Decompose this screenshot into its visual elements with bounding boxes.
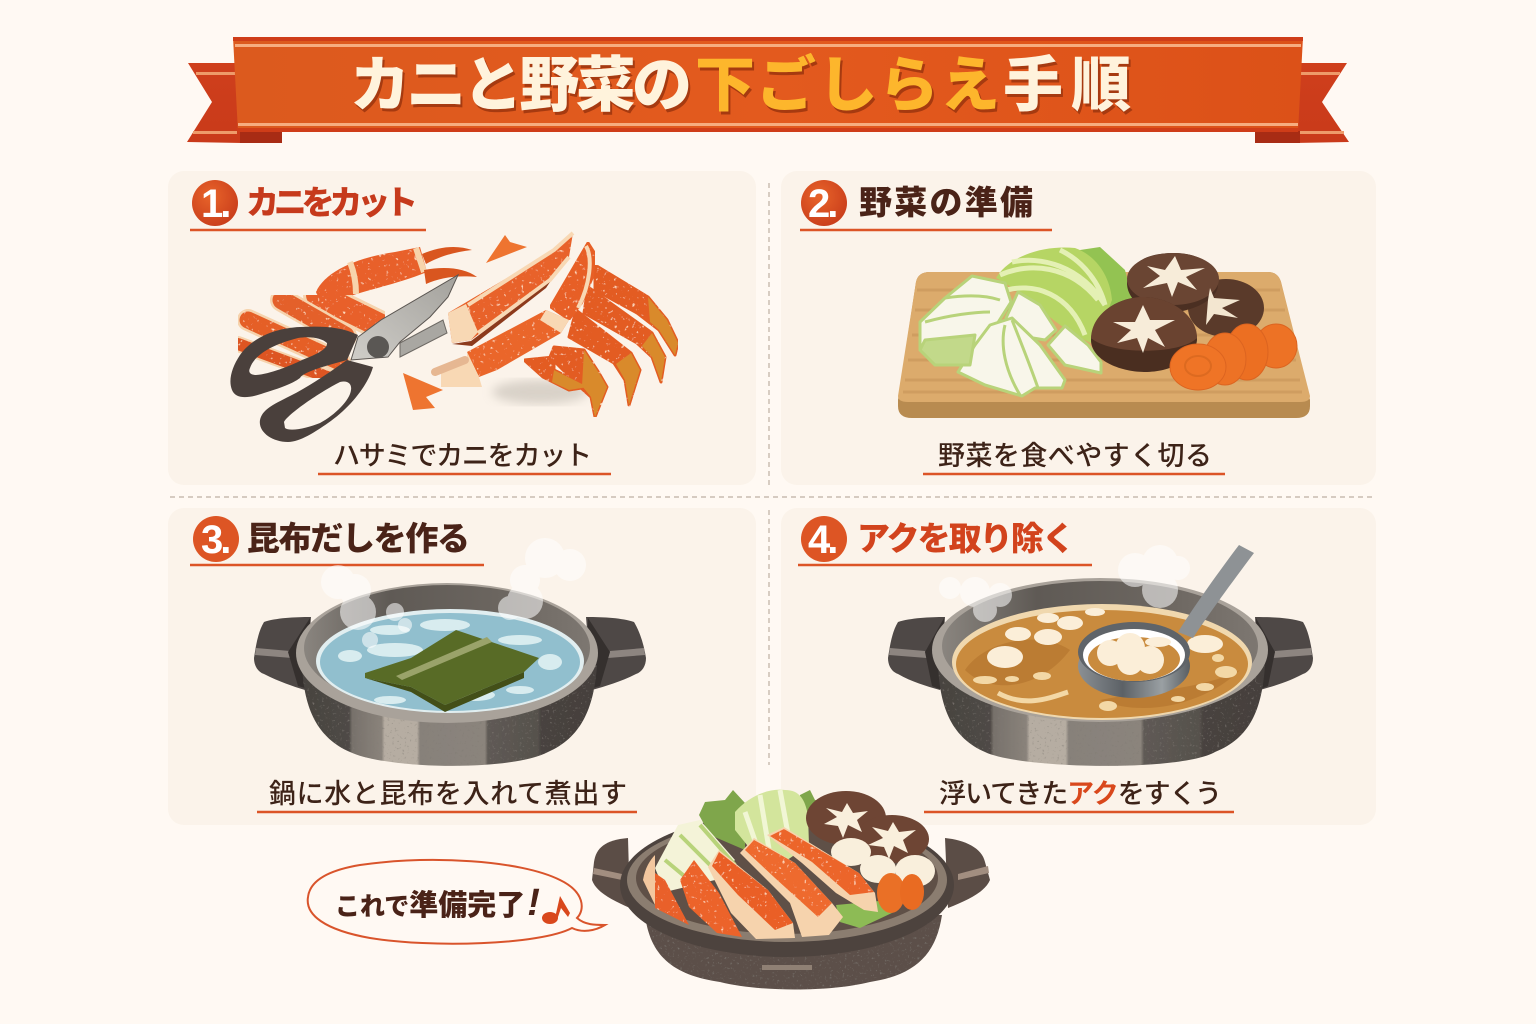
arrow: upper cut mark bbox=[486, 235, 527, 263]
icon: crab legs right bbox=[435, 233, 678, 417]
callout: speech bubble: これで準備完了! bbox=[335, 882, 540, 924]
icon: pot body bbox=[938, 665, 1265, 766]
icon: steam bbox=[939, 545, 1190, 622]
step 3 heading: 3. bbox=[201, 518, 229, 562]
step 2 heading bbox=[800, 180, 1052, 230]
pot handles bbox=[592, 838, 990, 908]
carrot slices bbox=[877, 873, 924, 913]
step 1 caption: ハサミでカニをカット bbox=[333, 441, 592, 471]
pot body band bbox=[762, 965, 812, 970]
title banner bbox=[187, 37, 1349, 143]
icon: scissors bbox=[230, 275, 458, 442]
right ribbon tail bbox=[1255, 63, 1349, 143]
green leaves and cabbage bbox=[655, 790, 894, 928]
icon: broth with scum bbox=[952, 604, 1252, 720]
panel: step 4 background bbox=[781, 508, 1376, 825]
icon: pot body bbox=[302, 665, 597, 766]
icon: crab claw arm bbox=[316, 247, 477, 300]
icon: ladle bbox=[1078, 545, 1254, 698]
title text: カニと野菜の bbox=[350, 52, 692, 119]
icon: pot rim bbox=[932, 578, 1268, 722]
panel: step 1 cut crab bbox=[190, 180, 678, 474]
fish balls bbox=[831, 838, 935, 887]
panel: step 2 vegetables bbox=[800, 180, 1310, 474]
step 1 heading bbox=[190, 180, 426, 230]
panel: step 3 background bbox=[168, 508, 756, 825]
step 2 heading: 野菜の準備 bbox=[859, 184, 1033, 221]
icon: pot handles bbox=[888, 617, 1313, 690]
step 1 heading: カニをカット bbox=[246, 184, 418, 221]
title text: 下ごしらえ bbox=[695, 52, 1000, 119]
icon: crab legs left bbox=[238, 295, 385, 378]
icon: finished crab hot pot bbox=[592, 790, 990, 990]
icon: shiitake mushrooms bbox=[1091, 253, 1264, 372]
icon: pot rim bbox=[296, 583, 598, 723]
panel: step 2 background bbox=[781, 171, 1376, 485]
pot body bbox=[645, 915, 942, 990]
icon: white cabbage wedges bbox=[920, 276, 1101, 396]
icon: cutting board bbox=[898, 272, 1310, 418]
step 2 caption: 野菜を食べやすく切る bbox=[938, 441, 1212, 471]
left ribbon tail bbox=[187, 63, 282, 143]
step 2 heading: 2. bbox=[808, 182, 836, 226]
icon: kombu bbox=[365, 630, 539, 712]
mushrooms bbox=[806, 791, 929, 863]
step 4 heading: アクを取り除く bbox=[857, 520, 1075, 557]
crab leg pieces bbox=[643, 827, 878, 939]
panel: step 1 background bbox=[168, 171, 756, 485]
pot rim bbox=[620, 813, 954, 957]
ribbon band bbox=[233, 37, 1303, 132]
icon: water bbox=[316, 609, 584, 713]
arrow: lower cut mark bbox=[403, 373, 443, 410]
icon: steam bbox=[321, 538, 586, 648]
step 4 caption: 浮いてきたアクをすくう bbox=[939, 779, 1222, 809]
icon: music note bbox=[542, 896, 570, 924]
panel: step 3 kombu dashi bbox=[190, 516, 646, 812]
step 3 caption: 鍋に水と昆布を入れて煮出す bbox=[269, 779, 627, 809]
icon: green cabbage bbox=[996, 247, 1134, 345]
icon: crab cluster shadow bbox=[492, 380, 588, 404]
title text: 手順 bbox=[1003, 52, 1131, 119]
title text bbox=[350, 52, 1131, 119]
icon: carrot slices bbox=[1170, 324, 1297, 390]
step 3 heading: 昆布だしを作る bbox=[247, 520, 470, 557]
step 1 heading: 1. bbox=[201, 182, 229, 226]
icon: pot handles bbox=[254, 617, 646, 690]
panel: step 4 skim bbox=[798, 516, 1313, 812]
step 4 heading bbox=[798, 516, 1092, 565]
step 4 heading: 4. bbox=[808, 518, 836, 562]
callout: speech bubble bbox=[308, 860, 605, 944]
step 3 heading bbox=[190, 516, 484, 565]
